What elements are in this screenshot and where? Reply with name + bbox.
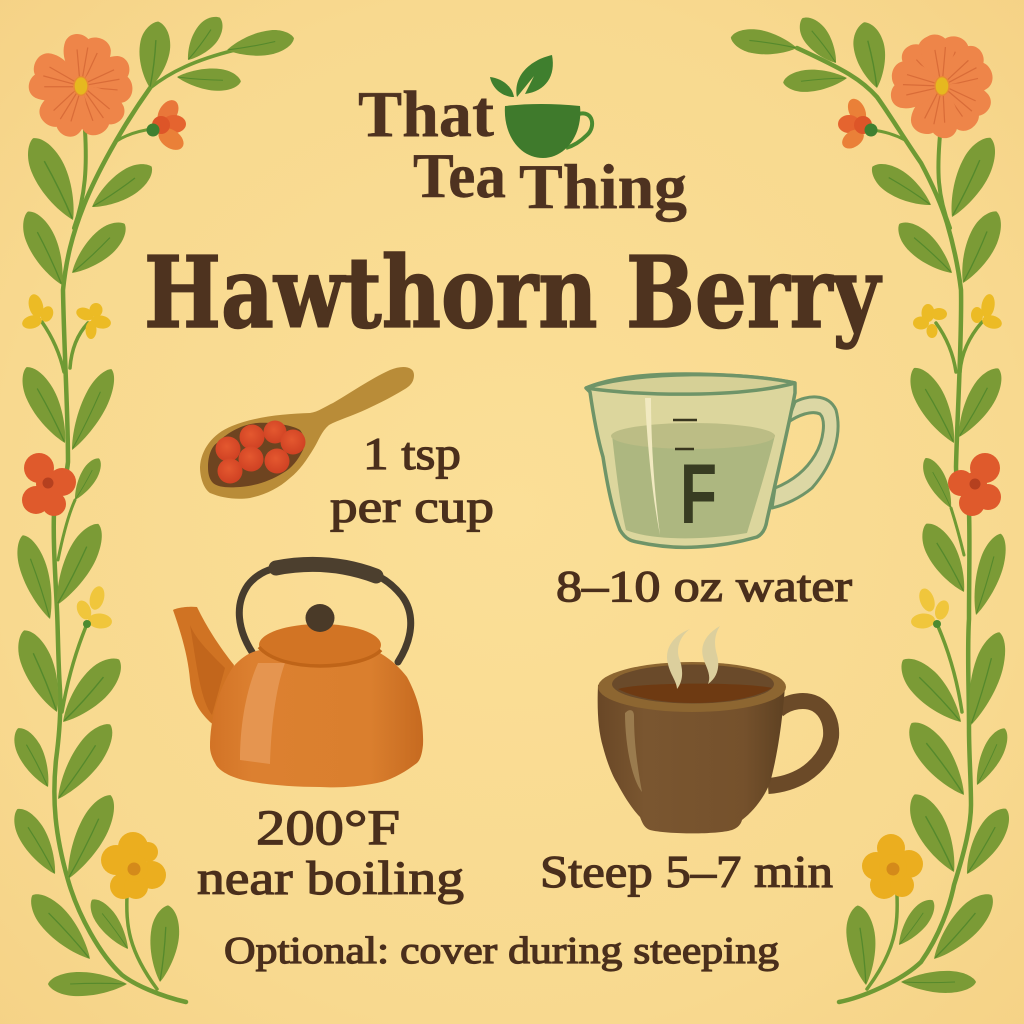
water — [612, 435, 775, 538]
logo cup icon — [490, 55, 592, 158]
right red flower — [948, 453, 1001, 516]
logo: That Tea Thing — [358, 55, 687, 222]
left yellow twin flowers — [21, 293, 112, 339]
icon: wooden spoon — [200, 367, 414, 499]
tea surface — [618, 684, 772, 703]
right garland stems — [797, 48, 982, 1002]
label: steep time: Steep 5–7 min — [540, 846, 833, 897]
kettle body — [210, 650, 423, 787]
left red flower — [22, 453, 76, 516]
cup handle — [772, 397, 838, 508]
title: Hawthorn Berry — [144, 236, 883, 351]
logo text: Thing — [519, 151, 687, 222]
logo text: Tea — [413, 140, 506, 211]
right floral garland — [729, 11, 1017, 1002]
left garland leaves — [6, 10, 296, 996]
glass highlight — [645, 398, 660, 535]
kettle knob — [306, 604, 334, 632]
cup rim — [586, 375, 795, 394]
step: measuring cup — [586, 374, 838, 547]
label: 200°F near boiling: 200°F — [256, 799, 400, 855]
logo text: That — [358, 78, 494, 151]
right small orange flower — [838, 96, 878, 152]
spoon bowl — [208, 423, 305, 487]
kettle handle — [239, 564, 411, 662]
step: brown tea cup — [598, 626, 831, 833]
right big yellow flower — [862, 834, 923, 899]
measurement ticks and F — [673, 420, 717, 542]
berries — [216, 420, 306, 484]
cup body — [586, 374, 795, 547]
left big yellow flower — [101, 832, 166, 899]
label: 8-10 oz water: 8–10 oz water — [556, 562, 852, 611]
kettle lid — [259, 624, 381, 666]
label: 1 tsp per cup — [330, 428, 494, 532]
label: 200°F near boiling — [197, 799, 464, 905]
mug highlight — [625, 710, 642, 792]
label: 1 tsp per cup: 1 tsp — [363, 428, 461, 479]
kettle highlight — [240, 663, 285, 764]
measurement ticks and F: F — [680, 447, 717, 542]
mug handle — [768, 701, 831, 786]
left big orange flower — [26, 32, 135, 142]
steam — [667, 626, 720, 689]
label: 200°F near boiling: near boiling — [197, 852, 464, 905]
left garland stems — [42, 50, 235, 1002]
mug body — [598, 685, 785, 833]
logo text — [358, 78, 687, 222]
right big orange flower — [890, 30, 998, 141]
right yellow twin flowers — [913, 293, 1003, 338]
left small orange flower — [146, 96, 188, 154]
right yellow single flower — [910, 586, 952, 630]
left floral garland — [6, 10, 296, 1002]
kettle spout — [173, 607, 234, 730]
footnote: Optional: cover during steeping — [224, 930, 779, 972]
left yellow single flower — [74, 585, 113, 630]
right garland leaves — [729, 11, 1017, 993]
label: 1 tsp per cup: per cup — [330, 481, 494, 532]
mug rim — [598, 662, 786, 712]
step: spoon with berries — [200, 367, 414, 499]
step: kettle — [173, 564, 423, 787]
